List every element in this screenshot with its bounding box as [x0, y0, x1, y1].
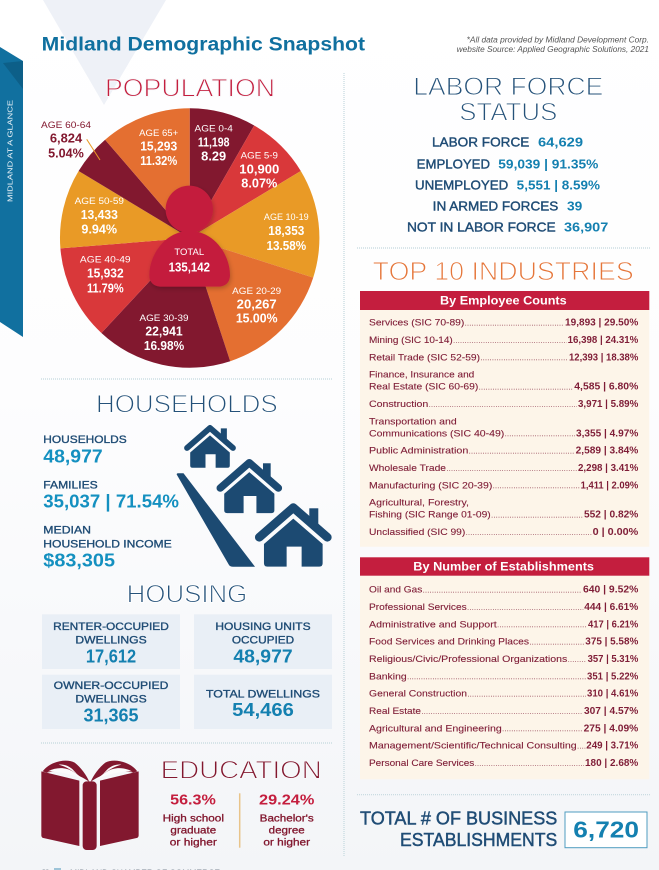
label: age 50-59	[75, 196, 124, 236]
label: age 30-39: 16.98%	[144, 339, 184, 353]
row: professional services: 444 | 6.61%	[584, 602, 639, 613]
row: food services	[369, 637, 639, 648]
stat: bachelor's degree	[259, 792, 314, 849]
row: transportation and communications	[369, 416, 639, 439]
row: food services: 375 | 5.58%	[585, 637, 639, 648]
label: age 65+: 11.32%	[140, 154, 177, 168]
heading: households: HOUSEHOLDS	[96, 391, 278, 419]
row: construction: 3,971 | 5.89%	[578, 399, 639, 410]
label: age 40-49: AGE 40-49	[80, 255, 131, 265]
label: age 40-49: 15,932	[87, 267, 124, 281]
row: finance, insurance and real estate: 4,585 | 6.80%	[574, 382, 639, 393]
table: by employee counts	[360, 291, 649, 547]
stat: not in labor force: NOT IN LABOR FORCE	[407, 220, 556, 235]
row: agricultural and engineering: 275 | 4.09%	[584, 723, 639, 734]
stat: high school graduate	[163, 792, 224, 849]
callout label	[360, 809, 557, 850]
row: administrative and support: 417 | 6.21%	[588, 619, 639, 630]
stat: bachelor's degree: Bachelor's	[260, 814, 314, 825]
stat: median household income	[43, 525, 172, 570]
table header	[360, 291, 649, 310]
heading: population: POPULATION	[105, 74, 275, 102]
label: age 20-29	[232, 286, 281, 326]
label: age 60-64: 6,824	[50, 132, 82, 146]
footer: cropped page line	[41, 868, 220, 870]
row: oil and gas: 640 | 9.52%	[583, 585, 639, 596]
card: housing units occupied: OCCUPIED	[232, 635, 294, 647]
row: public administration: 2,589 | 3.84%	[576, 446, 639, 457]
row: real estate: 307 | 4.57%	[584, 706, 639, 717]
row: finance, insurance and real estate	[369, 370, 639, 393]
label: age 5-9	[239, 150, 279, 191]
table header: By Employee Counts	[440, 293, 567, 307]
card: total dwellings: 54,466	[232, 700, 294, 720]
stat: unemployed	[415, 177, 600, 192]
row: personal care services: 180 | 2.68%	[585, 758, 639, 769]
label: age 10-19: 13.58%	[266, 239, 306, 253]
card: renter-occupied dwellings: 17,612	[86, 647, 136, 667]
row: transportation and communications: 3,355 | 4.97%	[576, 428, 639, 439]
label: age 10-19: AGE 10-19	[264, 212, 309, 222]
card: owner-occupied dwellings: OWNER-OCCUPIED	[54, 680, 168, 692]
row: unclassified: 0 | 0.00%	[593, 527, 639, 538]
row: agricultural and engineering: Agricultural and Engineering	[369, 723, 502, 734]
row: manufacturing: Manufacturing (SIC 20-39)	[369, 480, 492, 491]
row: banking: 351 | 5.22%	[587, 671, 639, 682]
row: banking: Banking	[369, 671, 407, 682]
label: age 0-4: 8.29	[201, 150, 226, 164]
label: age 65+	[139, 128, 178, 168]
source note	[457, 36, 649, 54]
table header	[360, 557, 649, 576]
panel: households	[43, 391, 327, 570]
card: housing units occupied	[194, 614, 332, 669]
stat: labor force: 64,629	[538, 135, 583, 150]
stat: median household income: MEDIAN	[43, 525, 91, 537]
label: age 5-9: AGE 5-9	[241, 150, 278, 160]
title: Midland Demographic Snapshot	[42, 34, 366, 56]
row: finance, insurance and real estate: Finance, Insurance and	[369, 370, 474, 381]
heading: labor force status	[413, 73, 603, 127]
heading: top 10 industries: TOP 10 INDUSTRIES	[373, 258, 634, 286]
row: real estate	[369, 706, 639, 717]
card: owner-occupied dwellings	[42, 675, 180, 729]
label: age 30-39	[140, 313, 188, 353]
stat: in armed forces: IN ARMED FORCES	[433, 199, 559, 214]
row: services	[369, 318, 639, 329]
row: religious organizations: Religious/Civic/Professional Organizations	[369, 654, 568, 665]
card: renter-occupied dwellings: DWELLINGS	[75, 635, 147, 647]
stat: in armed forces: 39	[567, 199, 582, 214]
label: age 40-49	[80, 255, 131, 295]
source note: *All data provided by Midland Development Corp.	[467, 36, 649, 45]
label: age 10-19: 18,353	[268, 224, 304, 238]
stat: high school graduate: graduate	[170, 826, 217, 837]
pie chart: population by age	[60, 108, 319, 368]
stat: employed	[417, 156, 599, 171]
label: age 65+: 15,293	[140, 140, 177, 154]
row: agricultural, forestry, fishing: Fishing (SIC Range 01-09)	[369, 510, 491, 521]
row: wholesale trade	[369, 463, 639, 474]
label: age 60-64: AGE 60-64	[41, 120, 91, 130]
card: housing units occupied: 48,977	[233, 647, 293, 667]
label: age 0-4: 11,198	[198, 136, 230, 150]
label: age 20-29: 15.00%	[236, 312, 278, 326]
row: religious organizations	[369, 654, 639, 665]
heading: labor force status: STATUS	[459, 99, 557, 127]
label: age 5-9: 10,900	[239, 162, 279, 176]
stat: not in labor force	[407, 220, 608, 235]
heading: education: EDUCATION	[161, 757, 322, 785]
card: housing units occupied: HOUSING UNITS	[215, 621, 311, 633]
stat: bachelor's degree: 29.24%	[259, 792, 314, 808]
table: by number of establishments	[360, 557, 649, 779]
label: age 65+: AGE 65+	[139, 128, 178, 138]
row: oil and gas	[369, 585, 639, 596]
row: retail trade	[369, 352, 639, 363]
icon: three houses on a road	[177, 428, 327, 567]
row: management consulting: Management/Scientific/Technical Consulting	[369, 741, 577, 752]
row: real estate: Real Estate	[369, 706, 421, 717]
row: construction: Construction	[369, 399, 428, 410]
stat: households: HOUSEHOLDS	[43, 434, 127, 446]
icon: person with total: TOTAL	[174, 247, 204, 257]
row: professional services	[369, 602, 639, 613]
heading: housing: HOUSING	[127, 580, 247, 608]
stat: employed: EMPLOYED	[417, 156, 490, 171]
stat: high school graduate: High school	[163, 814, 224, 825]
row: general construction: 310 | 4.61%	[587, 689, 639, 700]
label: age 20-29: 20,267	[237, 297, 277, 311]
stat: households	[43, 434, 127, 466]
row: personal care services: Personal Care Services	[369, 758, 475, 769]
stat: unemployed: UNEMPLOYED	[415, 177, 508, 192]
row: mining: 16,398 | 24.31%	[568, 335, 639, 346]
heading: labor force status: LABOR FORCE	[413, 73, 603, 101]
row: unclassified: Unclassified (SIC 99)	[369, 527, 465, 538]
row: administrative and support	[369, 619, 639, 630]
stat: families: 35,037 | 71.54%	[43, 492, 179, 512]
stat: median household income: HOUSEHOLD INCOME	[43, 538, 172, 550]
row: administrative and support: Administrative and Support	[369, 619, 497, 630]
row: wholesale trade: Wholesale Trade	[369, 463, 446, 474]
label: age 40-49: 11.79%	[87, 281, 124, 295]
row: transportation and communications: Communications (SIC 40-49)	[369, 428, 504, 439]
icon: person with total: 135,142	[169, 261, 210, 275]
card: renter-occupied dwellings: RENTER-OCCUPIED	[53, 621, 169, 633]
row: manufacturing: 1,411 | 2.09%	[581, 480, 639, 491]
stat: bachelor's degree: degree	[269, 826, 305, 837]
sidebar tab: Midland at a glance: MIDLAND AT A GLANCE	[5, 100, 14, 202]
card: total dwellings: TOTAL DWELLINGS	[206, 688, 320, 700]
stat: families	[43, 479, 179, 512]
label: age 0-4	[195, 124, 233, 164]
row: finance, insurance and real estate: Real Estate (SIC 60-69)	[369, 382, 478, 393]
row: wholesale trade: 2,298 | 3.41%	[578, 463, 639, 474]
row: management consulting	[369, 741, 639, 752]
stat: households: 48,977	[43, 446, 103, 466]
row: retail trade: 12,393 | 18.38%	[569, 352, 639, 363]
row: mining	[369, 335, 639, 346]
callout: total business establishments	[360, 809, 647, 850]
icon: person with total	[149, 186, 230, 287]
row: transportation and communications: Transportation and	[369, 416, 457, 427]
label: age 50-59: 13,433	[81, 208, 118, 222]
label: age 5-9: 8.07%	[241, 177, 277, 191]
row: construction	[369, 399, 639, 410]
callout value box	[565, 812, 647, 848]
panel: population	[41, 74, 319, 368]
stat: not in labor force: 36,907	[564, 220, 608, 235]
row: public administration	[369, 446, 639, 457]
row: personal care services	[369, 758, 639, 769]
stat: bachelor's degree: or higher	[263, 838, 311, 849]
stat: families: FAMILIES	[43, 479, 98, 491]
stat: high school graduate: 56.3%	[170, 792, 216, 808]
row: general construction: General Construction	[369, 689, 467, 700]
stat: labor force: LABOR FORCE	[432, 135, 530, 150]
row: services: Services (SIC 70-89)	[369, 318, 464, 329]
row: management consulting: 249 | 3.71%	[586, 741, 639, 752]
label: age 50-59: 9.94%	[81, 222, 117, 236]
card: total dwellings	[194, 675, 332, 729]
stat: unemployed: 5,551 | 8.59%	[517, 177, 600, 192]
row: public administration: Public Administration	[369, 446, 468, 457]
callout value box: 6,720	[573, 816, 639, 842]
stat: employed: 59,039 | 91.35%	[498, 156, 599, 171]
table header: By Number of Establishments	[413, 560, 594, 574]
row: general construction	[369, 689, 639, 700]
label: age 50-59: AGE 50-59	[75, 196, 124, 206]
panel: education	[41, 757, 322, 850]
callout label: TOTAL # OF BUSINESS	[360, 809, 557, 829]
row: unclassified	[369, 527, 639, 538]
row: banking	[369, 671, 639, 682]
row: professional services: Professional Services	[369, 602, 467, 613]
row: oil and gas: Oil and Gas	[369, 585, 422, 596]
label: age 30-39: 22,941	[145, 324, 183, 338]
row: religious organizations: 357 | 5.31%	[588, 654, 639, 665]
card: renter-occupied dwellings	[42, 614, 180, 669]
row: mining: Mining (SIC 10-14)	[369, 335, 453, 346]
sidebar tab: Midland at a glance	[0, 47, 23, 337]
label: age 20-29: AGE 20-29	[232, 286, 281, 296]
label: age 10-19	[264, 212, 309, 253]
panel: housing	[42, 580, 332, 729]
callout label: ESTABLISHMENTS	[400, 830, 557, 850]
stat: high school graduate: or higher	[170, 838, 218, 849]
stat: median household income: $83,305	[43, 550, 115, 570]
card: owner-occupied dwellings: 31,365	[84, 706, 138, 726]
row: retail trade: Retail Trade (SIC 52-59)	[369, 352, 480, 363]
label: age 0-4: AGE 0-4	[195, 124, 233, 134]
row: agricultural and engineering	[369, 723, 639, 734]
panel: labor force status	[407, 73, 608, 235]
card: owner-occupied dwellings: DWELLINGS	[75, 694, 147, 706]
stat: labor force	[432, 135, 583, 150]
source note: website Source: Applied Geographic Solutions, 2021	[457, 45, 649, 54]
row: agricultural, forestry, fishing: 552 | 0.82%	[584, 510, 639, 521]
row: manufacturing	[369, 480, 639, 491]
label: age 30-39: AGE 30-39	[140, 313, 188, 323]
label: age 60-64	[41, 120, 91, 161]
row: agricultural, forestry, fishing	[369, 498, 639, 521]
row: agricultural, forestry, fishing: Agricultural, Forestry,	[369, 498, 469, 509]
row: services: 19,893 | 29.50%	[565, 318, 639, 329]
icon: open book	[41, 761, 139, 850]
row: food services: Food Services and Drinking Places	[369, 637, 529, 648]
label: age 60-64: 5.04%	[48, 147, 84, 161]
callout leader: age 60-64	[87, 139, 100, 160]
